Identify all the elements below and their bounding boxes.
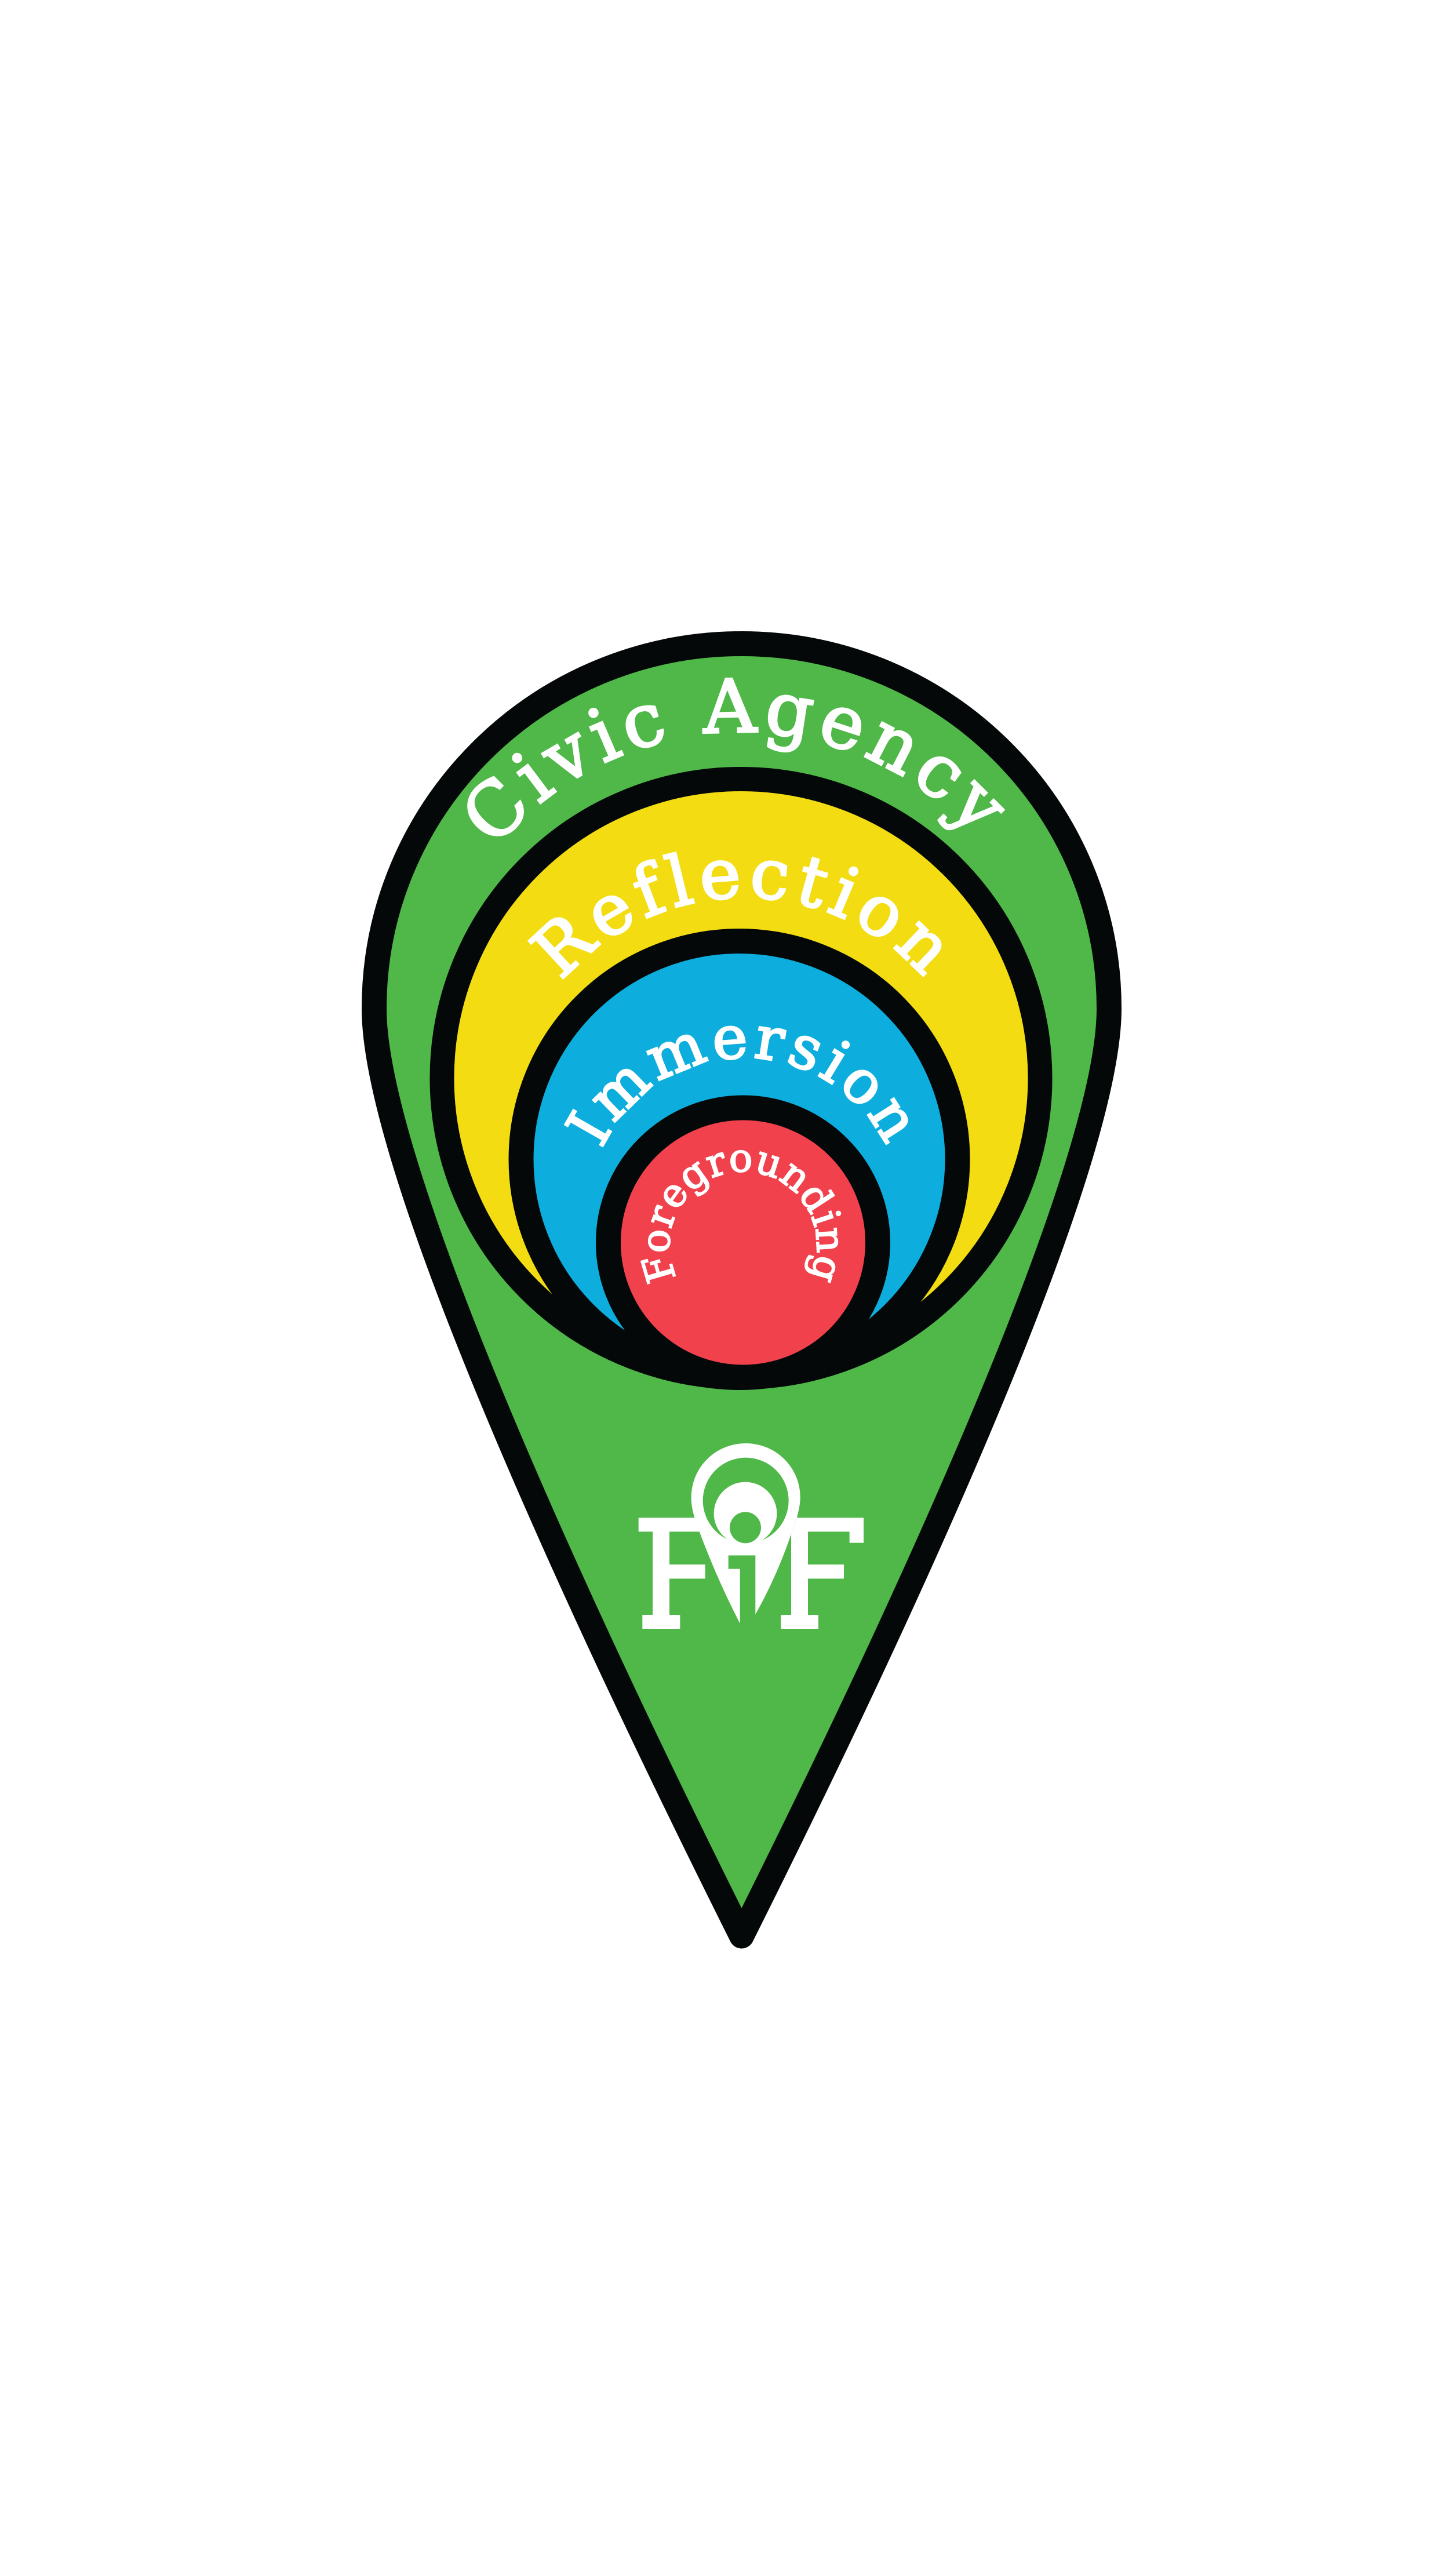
label: Reflection: Reflection [527, 852, 941, 980]
circle: Foregrounding red layer [609, 1108, 878, 1377]
circle: Reflection yellow layer [442, 779, 1040, 1377]
panel: green map pin outline [374, 643, 1109, 1936]
logo: green inner ring [703, 1458, 789, 1544]
circle: Immersion blue layer [521, 941, 957, 1377]
icon: FiF logo [639, 1443, 864, 1629]
label: Immersion: Immersion [563, 1026, 908, 1148]
label: Foregrounding: Foregrounding [640, 1150, 842, 1285]
logo: right F [781, 1518, 864, 1629]
label: Civic Agency: Civic Agency [467, 677, 1005, 836]
logo: white inner disc [714, 1482, 777, 1545]
logo: central pin i [691, 1443, 800, 1624]
logo: green dot [730, 1512, 761, 1543]
logo: left F [639, 1518, 705, 1629]
